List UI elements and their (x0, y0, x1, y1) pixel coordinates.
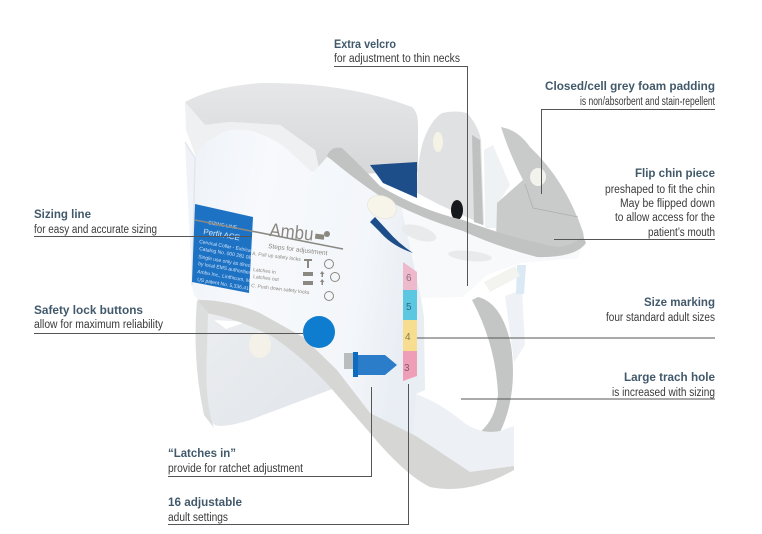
Ambu logo and steps: Latches out (253, 274, 280, 283)
side strap hole rim (472, 297, 513, 432)
callout: sizing line (34, 209, 252, 236)
callout: flip chin piece: May be flipped down (620, 198, 715, 210)
rear chin support panel (417, 112, 484, 225)
callout: foam padding: is non/absorbent and stain-repellent (580, 96, 716, 108)
callout: size marking: four standard adult sizes (606, 312, 715, 324)
callout: size marking: Size marking (644, 297, 715, 309)
left foam plate edge (196, 300, 214, 428)
callout: 16 adjustable: adult settings (168, 512, 228, 524)
strap tab (484, 266, 520, 292)
Ambu logo and steps: Latches in (253, 267, 276, 276)
callout: safety lock buttons: allow for maximum reliability (34, 319, 163, 331)
callout: safety lock buttons (34, 305, 303, 334)
size colour strip: 5 (406, 302, 412, 313)
main white body (185, 130, 425, 436)
Ambu logo and steps: C. Push down safety locks (251, 283, 310, 296)
body edge shading (185, 142, 195, 285)
blue label: SIZING LINE (208, 220, 238, 231)
callout: foam padding: Closed/cell grey foam padding (545, 81, 715, 93)
blue label: by local EMS authorities (198, 261, 252, 276)
blue label: Single use only as directed (198, 254, 258, 270)
Ambu logo and steps (251, 220, 340, 300)
blue label: Ambu Inc., Linthicum, MD USA (197, 269, 266, 287)
callout: foam padding (542, 81, 716, 194)
foam edge band (185, 102, 320, 172)
lower foam strip (198, 298, 514, 489)
size colour strip (403, 262, 417, 381)
blue label: US patent No. 5,336,419 (197, 277, 252, 293)
rivet (364, 192, 400, 222)
callout: latches in (168, 387, 372, 476)
blue velcro (370, 162, 417, 198)
callout: extra velcro: for adjustment to thin necks (334, 53, 460, 65)
chin foam (496, 127, 584, 253)
callout: large trach hole (461, 372, 715, 399)
callout: 16 adjustable: 16 adjustable (168, 497, 242, 509)
callout: 16 adjustable (168, 384, 408, 524)
blue label: Catalog No. 000 281 080 (199, 246, 255, 262)
Ambu logo and steps: Ambu (268, 220, 314, 246)
size colour strip: 3 (404, 363, 410, 374)
chin plate details (400, 221, 438, 245)
blue velcro under chin (370, 217, 413, 253)
lower white jaw (413, 394, 514, 472)
callout: large trach hole: Large trach hole (624, 372, 715, 384)
callout: safety lock buttons: Safety lock buttons (34, 305, 143, 317)
blue label: Cervical Collar - Extrication (199, 239, 259, 255)
plate cut-out (214, 320, 246, 329)
callout: sizing line: for easy and accurate sizing (34, 224, 157, 236)
callout: large trach hole: is increased with sizing (612, 387, 715, 399)
callout: latches in: provide for ratchet adjustment (168, 463, 304, 475)
blue safety lock button (303, 316, 335, 348)
callout: extra velcro: Extra velcro (334, 39, 396, 51)
collar illustration (185, 83, 586, 489)
blue latch (344, 352, 397, 377)
callout: flip chin piece (554, 168, 715, 240)
blue label: Perfit ACE (203, 227, 241, 242)
Ambu logo and steps: Steps for adjustment (268, 243, 328, 257)
callout: flip chin piece: to allow access for the (615, 212, 715, 224)
lower foam plate (197, 303, 335, 426)
back foam padding (185, 83, 418, 175)
Ambu logo and steps: A. Pull up safety locks (252, 251, 302, 263)
callout: sizing line: Sizing line (34, 209, 91, 221)
callout: size marking (417, 297, 715, 338)
size colour strip: 6 (406, 273, 412, 284)
callout: flip chin piece: preshaped to fit the chin (605, 184, 715, 196)
blue label (192, 204, 253, 293)
callout: flip chin piece: patient’s mouth (648, 227, 715, 239)
sizing line on collar (195, 220, 343, 249)
callout: latches in: “Latches in” (168, 448, 236, 460)
chin foam rim (327, 148, 586, 257)
callout: flip chin piece: Flip chin piece (635, 168, 715, 180)
callout: extra velcro (334, 39, 468, 286)
chin plate white (333, 152, 585, 298)
size colour strip: 4 (405, 332, 411, 343)
